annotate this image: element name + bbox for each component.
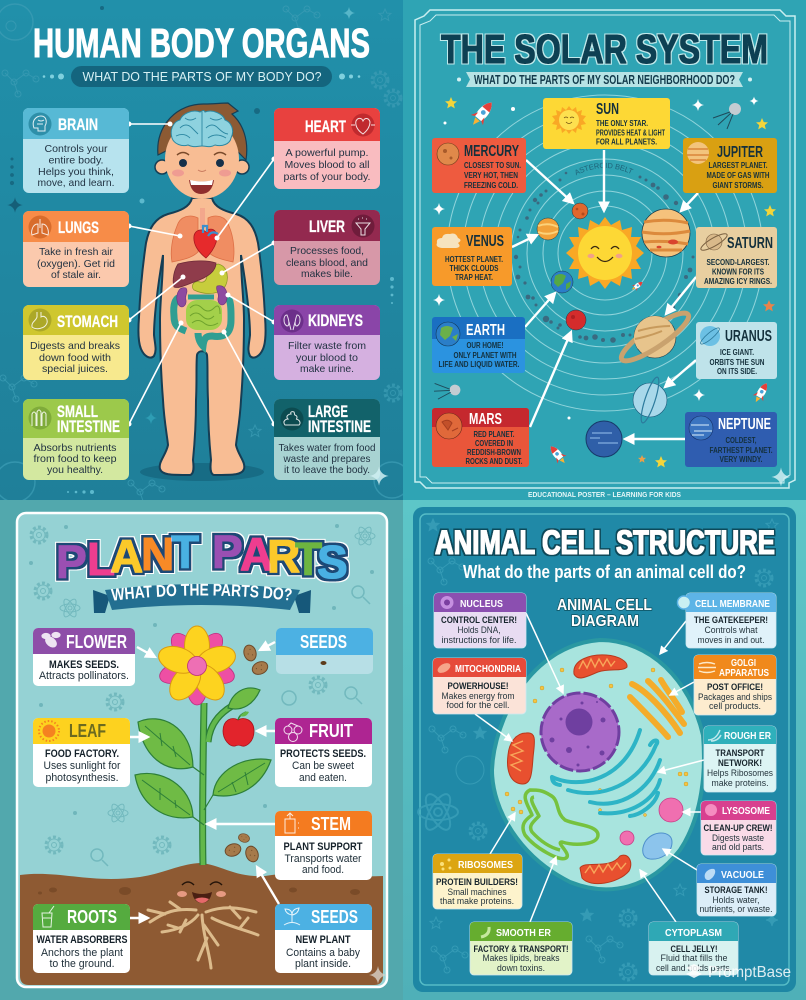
panel: solar system [403, 0, 806, 500]
golgi apparatus [630, 680, 684, 737]
background doodles [31, 525, 375, 866]
card: uranus: ON ITS SIDE. [717, 367, 757, 376]
card: brain: entire body. [48, 154, 104, 166]
planet: mercury [572, 203, 588, 219]
card: seeds (bottom): NEW PLANT [296, 934, 351, 946]
card: neptune [685, 412, 777, 467]
title: T [294, 533, 322, 585]
apple [223, 712, 254, 746]
card: heart: parts of your body. [284, 171, 370, 183]
card: neptune: FARTHEST PLANET. [710, 446, 772, 455]
liver [173, 261, 216, 288]
card: ribosomes: that make proteins. [440, 896, 514, 906]
card: liver: Processes food, [290, 245, 364, 257]
card: earth [432, 317, 525, 373]
card: nucleus: NUCLEUS [460, 598, 503, 610]
card: ribosomes: PROTEIN BUILDERS! [436, 877, 518, 887]
card: flower: MAKES SEEDS. [49, 659, 119, 671]
planet: earth [551, 271, 573, 293]
card: smooth er [470, 922, 572, 975]
card: cytoplasm: CYTOPLASM [665, 927, 722, 939]
card: stem: Transports water [284, 853, 362, 865]
planet: venus [537, 218, 559, 240]
card: mercury: MERCURY [464, 143, 519, 160]
child figure with organs [138, 103, 266, 481]
card: nucleus: Holds DNA, [458, 625, 500, 635]
card: uranus [696, 322, 777, 379]
card: small intestine: from food to keep [34, 453, 117, 465]
card: ribosomes [433, 854, 522, 909]
card: rough er: TRANSPORT [716, 748, 765, 758]
card: venus: TRAP HEAT. [455, 273, 493, 282]
card: mercury: VERY HOT, THEN [464, 171, 518, 180]
card: golgi apparatus [694, 655, 776, 715]
card: vacuole: nutrients, or waste. [700, 904, 772, 914]
card: neptune: NEPTUNE [718, 416, 771, 433]
card: fruit: PROTECTS SEEDS. [280, 748, 366, 760]
card: liver: cleans blood, and [286, 257, 368, 269]
card: cell membrane [678, 593, 776, 648]
planet: mars [566, 310, 586, 330]
panel: human body organs [0, 0, 410, 507]
subtitle pill: WHAT DO THE PARTS OF MY BODY DO? [82, 69, 322, 84]
card: venus: HOTTEST PLANET. [445, 255, 503, 264]
card: small intestine: INTESTINE [57, 417, 120, 436]
card: small intestine: Absorbs nutrients [34, 442, 116, 454]
card: jupiter [683, 138, 777, 193]
card: seeds (bottom): SEEDS [311, 907, 358, 927]
card: cytoplasm: Fluid that fills the [660, 953, 728, 963]
diagram heading [557, 597, 652, 630]
card: cell membrane: CELL MEMBRANE [695, 598, 770, 610]
stomach [192, 264, 227, 294]
title: L [87, 533, 115, 585]
card: flower: FLOWER [66, 632, 127, 652]
card: jupiter: MADE OF GAS WITH [706, 171, 770, 180]
card: seeds (top) [276, 628, 373, 674]
card: uranus: URANUS [725, 328, 772, 345]
card: rough er: make proteins. [712, 778, 768, 788]
lungs and trachea [171, 208, 234, 262]
card: ribosomes: RIBOSOMES [458, 859, 513, 871]
card: earth: LIFE AND LIQUID WATER. [438, 360, 520, 369]
card: stomach: Digests and breaks [30, 340, 120, 352]
card: rough er: Helps Ribosomes [707, 768, 773, 778]
card: mercury [432, 138, 526, 193]
card: uranus: ICE GIANT. [720, 348, 754, 357]
card: rough er: ROUGH ER [724, 730, 771, 742]
card: mars [432, 408, 529, 467]
flower [155, 626, 239, 706]
roots [148, 902, 258, 968]
card: vacuole: VACUOLE [721, 869, 764, 881]
card: saturn: KNOWN FOR ITS [712, 268, 765, 276]
card: mars: ROCKS AND DUST. [466, 457, 522, 466]
vacuole [643, 833, 672, 859]
title: A [240, 528, 273, 580]
card: golgi apparatus: cell products. [709, 701, 761, 711]
card: sun: SUN [596, 101, 619, 118]
card: liver: LIVER [309, 217, 345, 236]
card: nucleus: instructions for life. [442, 635, 516, 645]
card: rough er: NETWORK! [718, 758, 762, 768]
card: cell membrane: Controls what [704, 625, 758, 635]
card: smooth er: FACTORY & TRANSPORT! [474, 944, 568, 954]
card: leaf: LEAF [69, 721, 106, 741]
card: saturn: AMAZING ICY RINGS. [704, 277, 772, 286]
card: golgi apparatus: POST OFFICE! [707, 682, 763, 692]
card: fruit: and eaten. [299, 772, 347, 784]
brain [171, 110, 233, 147]
subtitle pill [43, 66, 360, 87]
card: small intestine: SMALL [57, 402, 98, 421]
rough endoplasmic reticulum [552, 730, 660, 816]
planet: uranus [633, 376, 667, 424]
mitochondria [508, 655, 631, 884]
card: sun: FOR ALL PLANETS. [596, 138, 657, 146]
card: roots [33, 904, 130, 973]
card: lysosome: and old parts. [712, 842, 764, 852]
orbit rings [447, 95, 763, 411]
subtitle: What do the parts of an animal cell do? [463, 562, 746, 582]
card: mars: REDDISH-BROWN [467, 448, 521, 457]
connector lines [126, 122, 276, 426]
card: smooth er: Makes lipids, breaks [482, 953, 560, 963]
card: earth: ONLY PLANET WITH [454, 351, 517, 360]
card: kidneys: make urine. [300, 363, 354, 375]
title: S [317, 536, 348, 588]
card: heart [274, 108, 380, 189]
planet: jupiter [642, 209, 690, 257]
card: vacuole: STORAGE TANK! [704, 885, 768, 895]
card: leaf: FOOD FACTORY. [45, 748, 119, 760]
planet: saturn [616, 306, 694, 368]
card: lysosome: LYSOSOME [722, 805, 770, 817]
card: large intestine: LARGE [308, 402, 348, 421]
card: lungs: of stale air. [51, 269, 101, 281]
subtitle banner [93, 584, 311, 613]
watermark: PromptBase [708, 964, 791, 981]
card: lungs: (oxygen). Get rid [37, 258, 115, 270]
card: smooth er: down toxins. [497, 963, 545, 973]
card: kidneys [274, 305, 380, 380]
heart [194, 226, 218, 258]
card: earth: OUR HOME! [466, 341, 504, 350]
sun [566, 217, 644, 289]
card: cell membrane: moves in and out. [698, 635, 764, 645]
lysosomes [620, 798, 683, 845]
card: venus: THICK CLOUDS [450, 264, 499, 273]
card: venus [432, 227, 512, 286]
card: lysosome: CLEAN-UP CREW! [704, 823, 772, 833]
small intestine [186, 297, 222, 330]
card: rough er [704, 726, 776, 792]
plant [135, 626, 271, 968]
card: jupiter: JUPITER [717, 144, 763, 161]
card: liver: makes bile. [301, 268, 353, 280]
card: mars: RED PLANET. [474, 430, 514, 439]
card: golgi apparatus: APPARATUS [719, 667, 769, 679]
footer note: EDUCATIONAL POSTER – LEARNING FOR KIDS [528, 490, 681, 499]
card: large intestine: it to leave the body. [284, 464, 370, 476]
ribosome dots [505, 668, 688, 816]
card: stem [275, 811, 372, 880]
card: sun [543, 98, 670, 149]
card: mars: MARS [469, 411, 502, 428]
title: HUMAN BODY ORGANS [33, 20, 370, 66]
card: mitochondria: MITOCHONDRIA [455, 663, 521, 675]
card: mercury: FREEZING COLD. [464, 181, 518, 190]
card: flower [33, 628, 135, 686]
asteroid belt [514, 162, 694, 343]
card: brain: Controls your [44, 143, 108, 155]
card: cytoplasm: CELL JELLY! [670, 944, 718, 954]
card: stem: STEM [311, 814, 351, 834]
card: heart: A powerful pump. [286, 147, 368, 159]
card: large intestine: waste and prepares [283, 453, 370, 465]
background science doodles [0, 4, 410, 507]
card: fruit: Can be sweet [292, 760, 354, 772]
card: mitochondria: food for the cell. [446, 700, 510, 710]
card: roots: WATER ABSORBERS [36, 934, 128, 946]
title: N [141, 528, 174, 580]
card: seeds (bottom): Contains a baby [286, 947, 360, 959]
title: A [110, 530, 143, 582]
card: neptune: COLDEST, [726, 436, 756, 445]
card: lungs: Take in fresh air [39, 246, 113, 258]
card: large intestine [274, 399, 380, 480]
card: venus: VENUS [466, 233, 504, 250]
card: large intestine: Takes water from food [278, 442, 376, 454]
card: seeds (top): SEEDS [300, 632, 347, 652]
nucleus [541, 693, 619, 771]
card: leaf [33, 718, 130, 787]
card: smooth er: SMOOTH ER [496, 927, 551, 939]
card: leaf: Uses sunlight for [44, 760, 121, 772]
card: cytoplasm: cell and holds parts. [656, 963, 732, 973]
asteroid belt: ASTEROID BELT [576, 162, 634, 176]
card: large intestine: INTESTINE [308, 417, 371, 436]
soil face [177, 882, 226, 903]
card: saturn [696, 227, 777, 288]
panel: animal cell [403, 500, 806, 1000]
body [138, 198, 266, 475]
card: stomach: special juices. [42, 363, 108, 375]
card: roots: ROOTS [67, 907, 117, 927]
card: brain: BRAIN [58, 115, 98, 134]
card: mars: COVERED IN [475, 439, 513, 448]
card: cell membrane: THE GATEKEEPER! [694, 615, 768, 625]
card: lungs [23, 211, 129, 287]
card: lungs: LUNGS [58, 218, 99, 237]
card: mercury: CLOSEST TO SUN. [464, 161, 521, 170]
smooth endoplasmic reticulum [523, 790, 598, 859]
subtitle banner: WHAT DO THE PARTS DO? [110, 584, 292, 600]
decorative rockets, satellites and stars [428, 96, 776, 467]
card: seeds (bottom) [275, 904, 372, 973]
card: kidneys: your blood to [296, 352, 358, 364]
card: nucleus [434, 593, 526, 648]
arrows [475, 613, 704, 922]
title: P [56, 536, 87, 588]
arrows [130, 642, 279, 918]
card: jupiter: LARGEST PLANET. [708, 161, 768, 170]
soil [20, 863, 383, 985]
card: roots: to the ground. [50, 958, 114, 970]
card: jupiter: GIANT STORMS. [712, 181, 764, 190]
card: brain: move, and learn. [38, 177, 114, 189]
card: fruit: FRUIT [309, 721, 353, 741]
card: sun: PROVIDES HEAT & LIGHT [596, 128, 665, 138]
seeds [223, 644, 270, 864]
card: sun: THE ONLY STAR. [596, 119, 648, 128]
card: kidneys: Filter waste from [288, 340, 366, 352]
head [155, 103, 249, 199]
card: neptune: VERY WINDY. [720, 455, 762, 464]
card: leaf: photosynthesis. [46, 772, 118, 784]
card: cytoplasm [649, 922, 738, 975]
kidneys [177, 286, 227, 307]
card: uranus: ORBITS THE SUN [710, 358, 765, 367]
card: stem: and food. [302, 864, 344, 876]
card: golgi apparatus: Packages and ships [698, 692, 772, 702]
card: small intestine: you healthy. [47, 464, 103, 476]
large intestine [174, 296, 231, 346]
card: golgi apparatus: GOLGI [731, 657, 756, 669]
card: saturn: SATURN [727, 235, 773, 252]
leaves [135, 688, 271, 825]
stem [203, 703, 232, 865]
diagram heading: DIAGRAM [571, 613, 639, 630]
card: kidneys: KIDNEYS [308, 311, 363, 330]
card: vacuole [697, 864, 776, 916]
background doodles [418, 519, 778, 980]
card: brain [23, 108, 129, 193]
card: roots: Anchors the plant [41, 947, 123, 959]
panel: plant parts [5, 500, 388, 988]
card: small intestine [23, 399, 129, 480]
card: lysosome [701, 801, 776, 855]
title: T [171, 526, 199, 578]
card: heart: HEART [305, 117, 346, 136]
card: earth: EARTH [466, 322, 505, 339]
card: liver [274, 210, 380, 285]
card: ribosomes: Small machines [448, 887, 507, 897]
card: lysosome: Digests waste [712, 833, 764, 843]
card: mitochondria [433, 658, 526, 714]
card: stomach [23, 305, 129, 380]
decorative double frame [415, 10, 795, 488]
arrows [512, 150, 698, 439]
card: fruit [275, 718, 372, 787]
card: mitochondria: Makes energy from [442, 691, 514, 701]
card: stem: PLANT SUPPORT [284, 841, 363, 853]
planet: neptune [586, 421, 622, 457]
title: R [267, 530, 300, 582]
card: flower: Attracts pollinators. [39, 670, 129, 682]
card: vacuole: Holds water, [712, 895, 760, 905]
title: P [212, 526, 243, 578]
card: nucleus: CONTROL CENTER! [441, 615, 517, 625]
diagram heading: ANIMAL CELL [557, 597, 652, 614]
card: heart: Moves blood to all [284, 159, 370, 171]
card: mitochondria: POWERHOUSE! [448, 681, 508, 691]
card: stomach: STOMACH [57, 312, 118, 331]
card: saturn: SECOND-LARGEST. [706, 258, 770, 267]
card: brain: Helps you think, [38, 166, 114, 178]
card: stomach: down food with [39, 352, 111, 364]
card: seeds (bottom): plant inside. [295, 958, 351, 970]
animal cell [492, 640, 704, 889]
